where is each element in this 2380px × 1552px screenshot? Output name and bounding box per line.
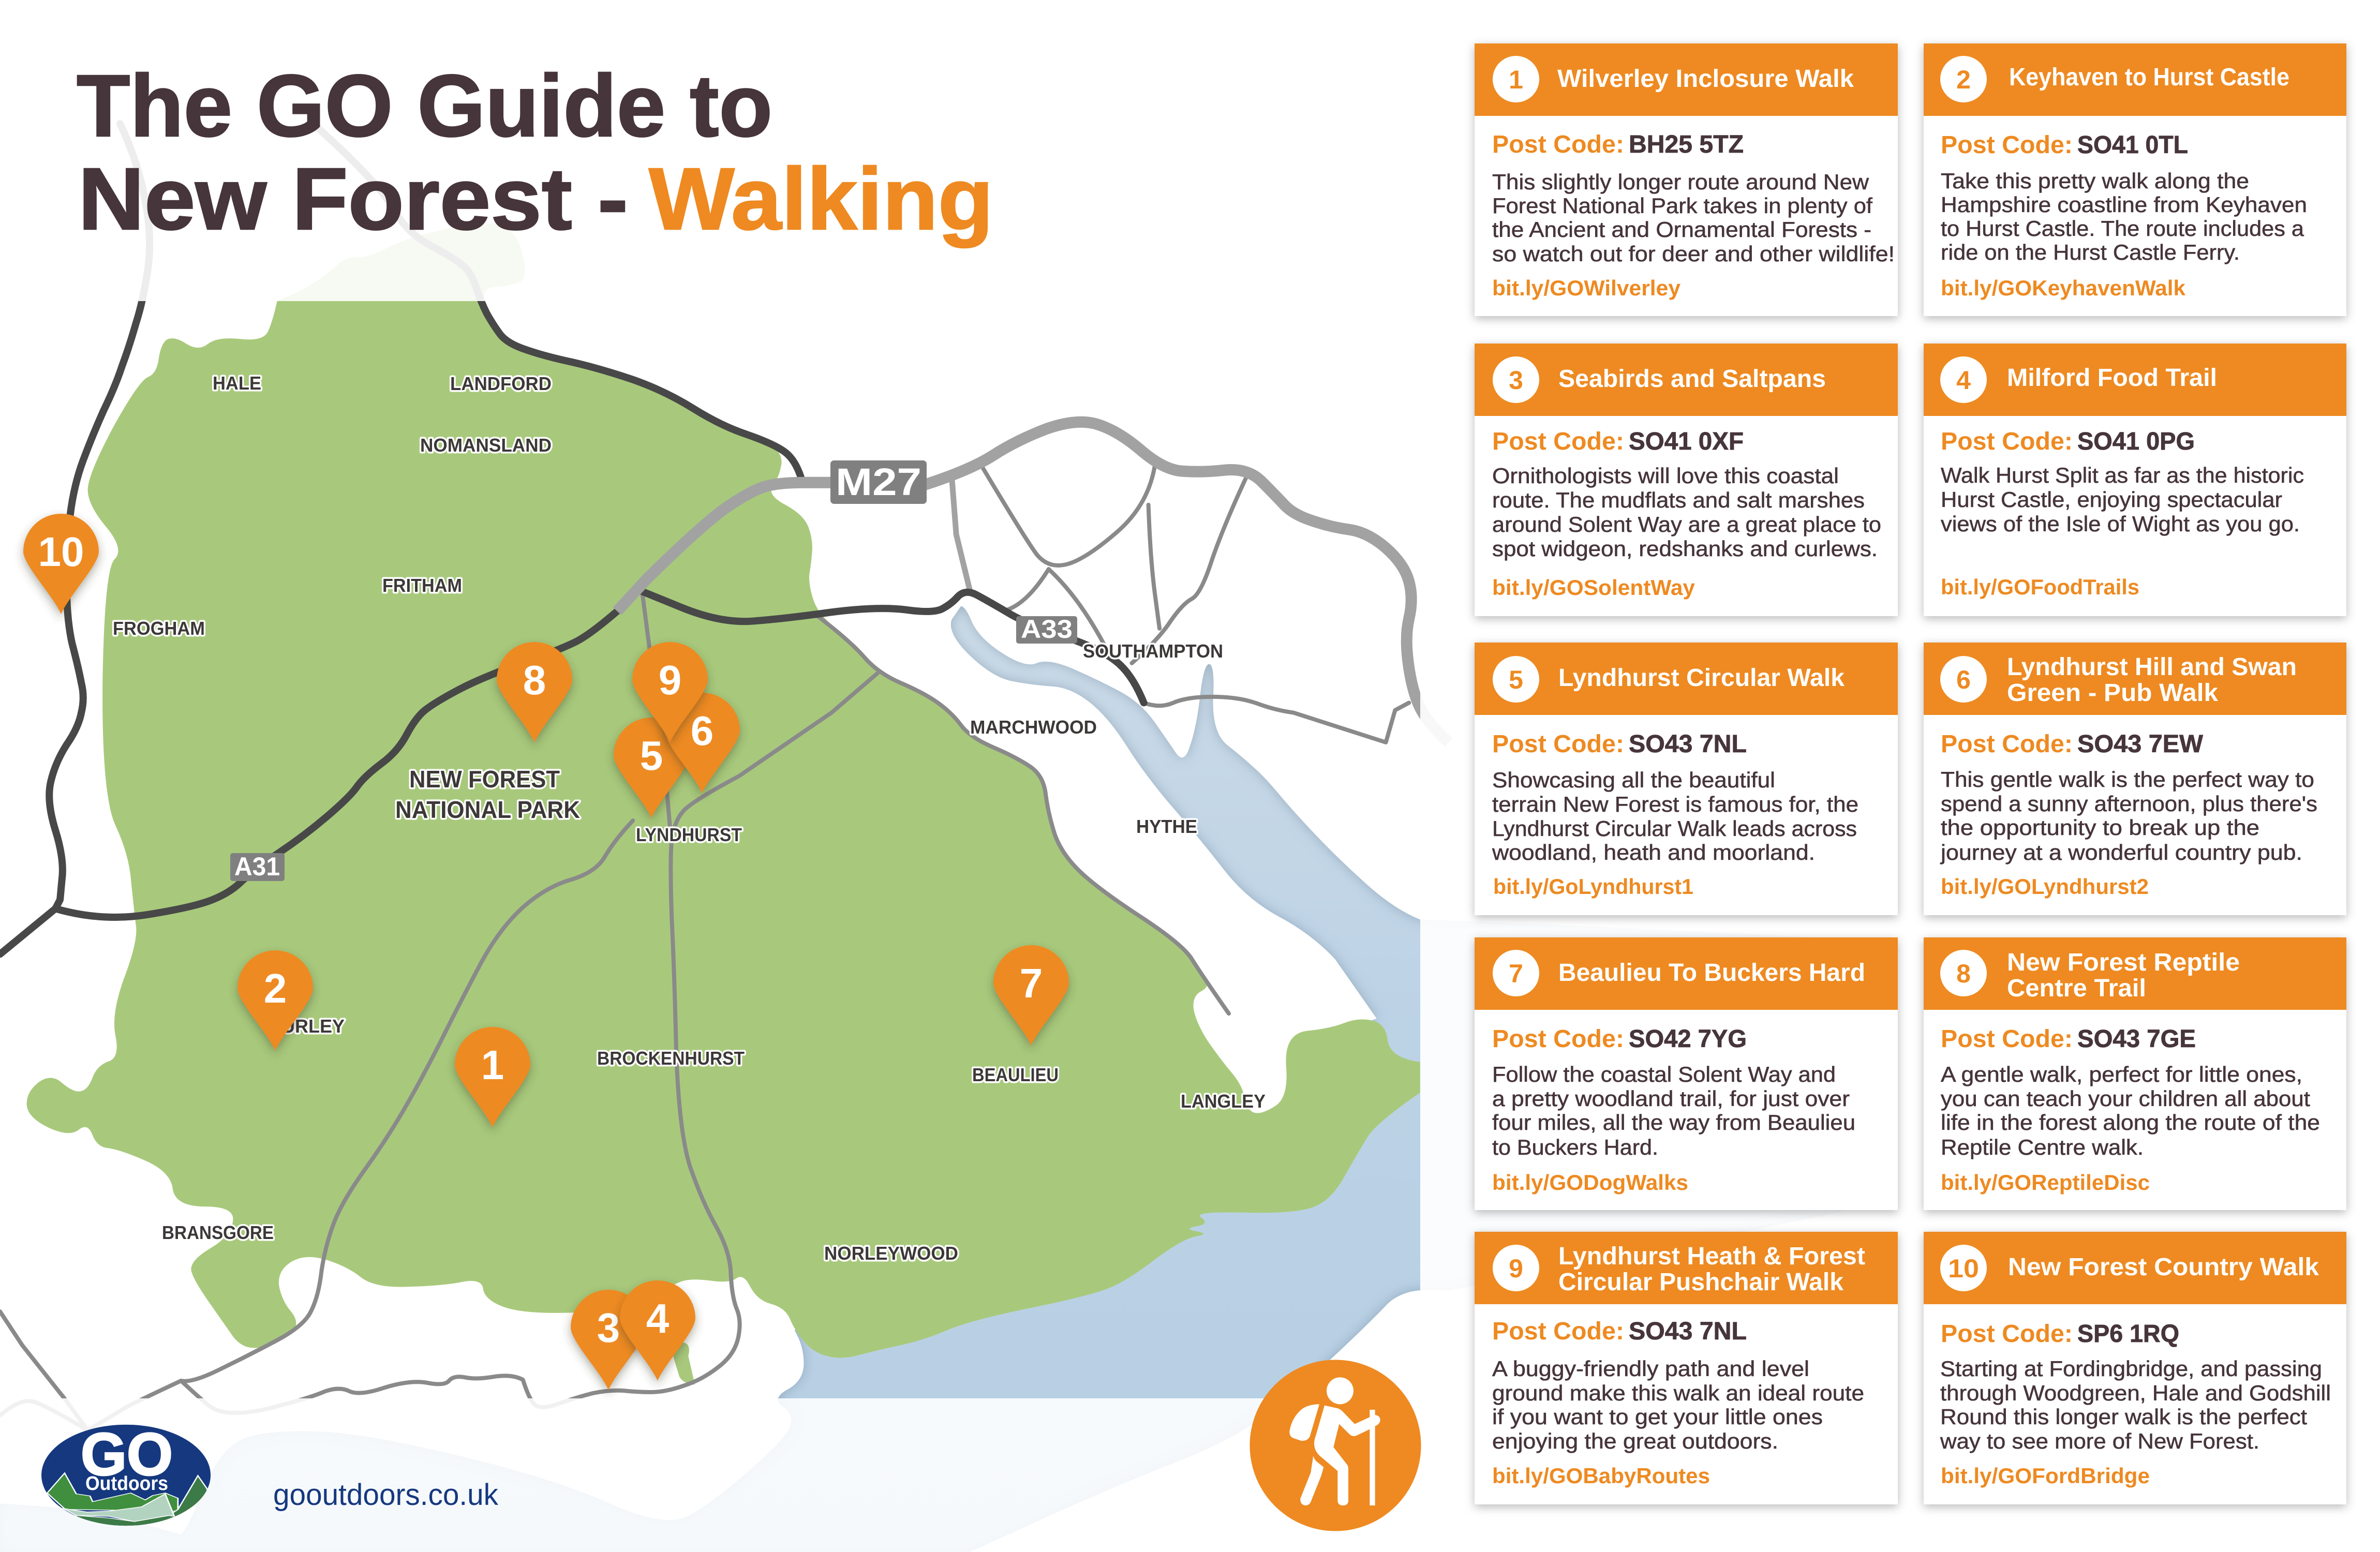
card 9: ground make this walk an ideal route [1492, 1381, 1864, 1405]
card 7: Follow the coastal Solent Way and [1492, 1062, 1836, 1086]
card 4: bit.ly/GOFoodTrails [1941, 575, 2139, 599]
map pin 7 [993, 945, 1069, 1046]
A31 road [0, 124, 801, 954]
card 6: journey at a wonderful country pub. [1940, 840, 2302, 864]
card 6: Post Code: [1941, 730, 2073, 758]
map pin 4: 4 [646, 1295, 670, 1341]
card 2: Post Code: [1941, 131, 2073, 159]
card 7: Post Code: [1492, 1025, 1624, 1053]
card 9: A buggy-friendly path and level [1492, 1356, 1809, 1381]
website: gooutdoors.co.uk [273, 1478, 499, 1512]
card 4: views of the Isle of Wight as you go. [1941, 512, 2300, 536]
card 7: 7 [1509, 959, 1523, 988]
card 7: bit.ly/GODogWalks [1492, 1170, 1688, 1195]
card 10: Starting at Fordingbridge, and passing [1940, 1356, 2322, 1381]
card 6: This gentle walk is the perfect way to [1941, 767, 2314, 792]
place labels [113, 372, 1266, 1264]
map pin 4 [620, 1280, 695, 1381]
card 9: Post Code: [1492, 1318, 1624, 1345]
card 5: Lyndhurst Circular Walk leads across [1492, 816, 1857, 841]
card 3: route. The mudflats and salt marshes [1492, 488, 1865, 512]
national park land [27, 223, 1420, 1358]
map pin 5 [614, 718, 689, 818]
card 10: New Forest Country Walk [2008, 1253, 2319, 1281]
card 10: way to see more of New Forest. [1940, 1429, 2259, 1453]
card 1: BH25 5TZ [1629, 131, 1744, 158]
road sign: A31: A31 [234, 852, 280, 881]
place labels: NEW FOREST [409, 766, 560, 793]
map pin 1 [455, 1027, 530, 1127]
card 7: four miles, all the way from Beaulieu [1492, 1110, 1855, 1135]
road sign: A33: A33 [1021, 615, 1073, 644]
card 6: the opportunity to break up the [1941, 815, 2259, 840]
map pin 10 [23, 514, 99, 614]
place labels: FROGHAM [113, 618, 205, 639]
map pin 10: 10 [38, 529, 84, 575]
card 8: Post Code: [1941, 1025, 2073, 1053]
card 9: Circular Pushchair Walk [1558, 1269, 1843, 1296]
map pin 8: 8 [523, 657, 546, 703]
card 5 [1475, 643, 1898, 915]
card 10: 10 [1948, 1254, 1979, 1283]
card 6: bit.ly/GOLyndhurst2 [1941, 874, 2149, 899]
card 3: spot widgeon, redshanks and curlews. [1492, 536, 1878, 561]
place labels: FRITHAM [382, 575, 462, 596]
place labels: BROCKENHURST [597, 1048, 745, 1069]
map pin 6: 6 [691, 708, 713, 754]
card 4: 4 [1956, 366, 1971, 395]
card 10 [1924, 1232, 2346, 1504]
title: The GO Guide to [77, 57, 772, 155]
minor roads [0, 465, 1409, 1430]
map pin 5: 5 [640, 733, 663, 779]
card 1: bit.ly/GOWilverley [1492, 276, 1681, 300]
card 5: woodland, heath and moorland. [1492, 840, 1815, 864]
card 8: Reptile Centre walk. [1941, 1135, 2144, 1159]
card 9: if you want to get your little ones [1492, 1405, 1823, 1429]
map pin 2 [237, 950, 313, 1051]
card 2: ride on the Hurst Castle Ferry. [1941, 240, 2240, 264]
map pin 3 [571, 1290, 646, 1390]
card 9: 9 [1509, 1254, 1523, 1283]
M27 road [617, 422, 1449, 742]
card 3: bit.ly/GOSolentWay [1492, 575, 1695, 600]
card 10: SP6 1RQ [2077, 1320, 2179, 1348]
card 1: Forest National Park takes in plenty of [1492, 193, 1872, 218]
card 6: SO43 7EW [2077, 730, 2204, 758]
place labels: NATIONAL PARK [395, 796, 580, 823]
sea and Southampton Water [0, 606, 1876, 1552]
map pin 2: 2 [264, 965, 287, 1011]
card 1: Post Code: [1492, 131, 1624, 158]
place labels: NOMANSLAND [420, 435, 552, 456]
map pin 3: 3 [597, 1305, 620, 1351]
map pin 9: 9 [659, 657, 681, 703]
card 5: SO43 7NL [1629, 730, 1747, 758]
card 7: SO42 7YG [1629, 1025, 1747, 1053]
card 3: around Solent Way are a great place to [1492, 512, 1881, 536]
card 3: SO41 0XF [1629, 428, 1744, 455]
title [77, 57, 993, 248]
card 2: Hampshire coastline from Keyhaven [1941, 192, 2307, 217]
title: Walking [649, 150, 993, 248]
card 4 [1924, 344, 2346, 616]
card 1: Wilverley Inclosure Walk [1557, 65, 1854, 93]
card 1: 1 [1509, 65, 1523, 94]
GO Outdoors logo: Outdoors [85, 1473, 168, 1495]
card 6: 6 [1956, 665, 1971, 694]
card 8: New Forest Reptile [2007, 949, 2240, 976]
map pin 1: 1 [481, 1042, 504, 1088]
card 8: life in the forest along the route of the [1941, 1110, 2320, 1135]
card 8 [1924, 937, 2346, 1210]
place labels: BRANSGORE [162, 1222, 274, 1243]
card 7: Beaulieu To Buckers Hard [1558, 959, 1865, 987]
card 5: bit.ly/GoLyndhurst1 [1493, 874, 1693, 899]
card 4: Milford Food Trail [2007, 364, 2217, 392]
card 10: Round this longer walk is the perfect [1940, 1405, 2307, 1429]
card 7: a pretty woodland trail, for just over [1492, 1086, 1850, 1111]
map pin 9 [632, 642, 708, 742]
place labels: HALE [213, 372, 261, 394]
card 1 [1475, 43, 1898, 316]
card 8: Centre Trail [2007, 975, 2146, 1002]
card 9 [1475, 1232, 1898, 1504]
card 5: Post Code: [1492, 730, 1624, 758]
card 5: Showcasing all the beautiful [1492, 768, 1775, 792]
GO Outdoors logo: GO [81, 1421, 173, 1488]
card 3: Post Code: [1492, 428, 1624, 455]
place labels: SOUTHAMPTON [1083, 640, 1223, 662]
card 10: bit.ly/GOFordBridge [1941, 1464, 2150, 1488]
card 2: SO41 0TL [2077, 131, 2188, 159]
place labels: LANDFORD [450, 373, 552, 394]
card 3: Seabirds and Saltpans [1558, 365, 1826, 393]
card 4: Walk Hurst Split as far as the historic [1941, 463, 2304, 487]
card 8: 8 [1956, 959, 1971, 988]
card 5: Lyndhurst Circular Walk [1558, 664, 1844, 692]
card 9: bit.ly/GOBabyRoutes [1492, 1464, 1710, 1488]
card 10: Post Code: [1941, 1320, 2073, 1348]
card 2: Keyhaven to Hurst Castle [2009, 64, 2289, 91]
place labels: HYTHE [1136, 816, 1197, 837]
card 1: so watch out for deer and other wildlife! [1492, 242, 1895, 266]
card 8: A gentle walk, perfect for little ones, [1941, 1062, 2302, 1086]
card 8: bit.ly/GOReptileDisc [1941, 1170, 2150, 1195]
card 8: you can teach your children all about [1941, 1086, 2310, 1111]
place labels: BEAULIEU [972, 1064, 1059, 1085]
card 3 [1475, 344, 1898, 616]
card 9: Lyndhurst Heath & Forest [1558, 1243, 1865, 1270]
spit of green by Hurst [670, 1342, 695, 1385]
card 9: enjoying the great outdoors. [1492, 1429, 1778, 1453]
place labels: MARCHWOOD [970, 717, 1097, 738]
card 10: through Woodgreen, Hale and Godshill [1940, 1381, 2331, 1405]
card 9: SO43 7NL [1629, 1318, 1747, 1345]
card 4: Hurst Castle, enjoying spectacular [1941, 487, 2282, 512]
place labels: LYNDHURST [636, 824, 742, 845]
title: New Forest - [78, 150, 628, 248]
card 5: terrain New Forest is famous for, the [1492, 792, 1858, 816]
card 6 [1924, 643, 2346, 915]
card 4: Post Code: [1941, 428, 2073, 455]
place labels: LANGLEY [1181, 1091, 1266, 1112]
card 6: spend a sunny afternoon, plus there's [1941, 792, 2317, 816]
card 7: to Buckers Hard. [1492, 1135, 1658, 1159]
card 2: to Hurst Castle. The route includes a [1941, 216, 2304, 241]
card 6: Lyndhurst Hill and Swan [2007, 653, 2297, 681]
card 2: bit.ly/GOKeyhavenWalk [1941, 276, 2186, 300]
A33 road [642, 591, 1144, 703]
card 2: Take this pretty walk along the [1941, 169, 2249, 193]
card 5: 5 [1509, 665, 1523, 694]
place labels: NORLEYWOOD [824, 1243, 958, 1264]
card 1: This slightly longer route around New [1492, 170, 1869, 194]
GO Outdoors logo [41, 1421, 214, 1528]
map pin 6 [664, 693, 740, 793]
place labels: BURLEY [268, 1016, 345, 1037]
map pin 8 [497, 642, 572, 742]
map pin 7: 7 [1020, 960, 1043, 1006]
icon: walker [1250, 1360, 1421, 1531]
card 7 [1475, 937, 1898, 1210]
card 8: SO43 7GE [2077, 1025, 2196, 1053]
card 4: SO41 0PG [2077, 428, 2195, 455]
map [0, 124, 1876, 1552]
card 6: Green - Pub Walk [2007, 679, 2218, 707]
card 3: 3 [1509, 366, 1523, 395]
card 3: Ornithologists will love this coastal [1492, 464, 1839, 488]
road sign: M27: M27 [836, 460, 921, 503]
card 2 [1924, 43, 2346, 316]
card 1: the Ancient and Ornamental Forests - [1492, 217, 1871, 242]
card 2: 2 [1956, 65, 1971, 94]
